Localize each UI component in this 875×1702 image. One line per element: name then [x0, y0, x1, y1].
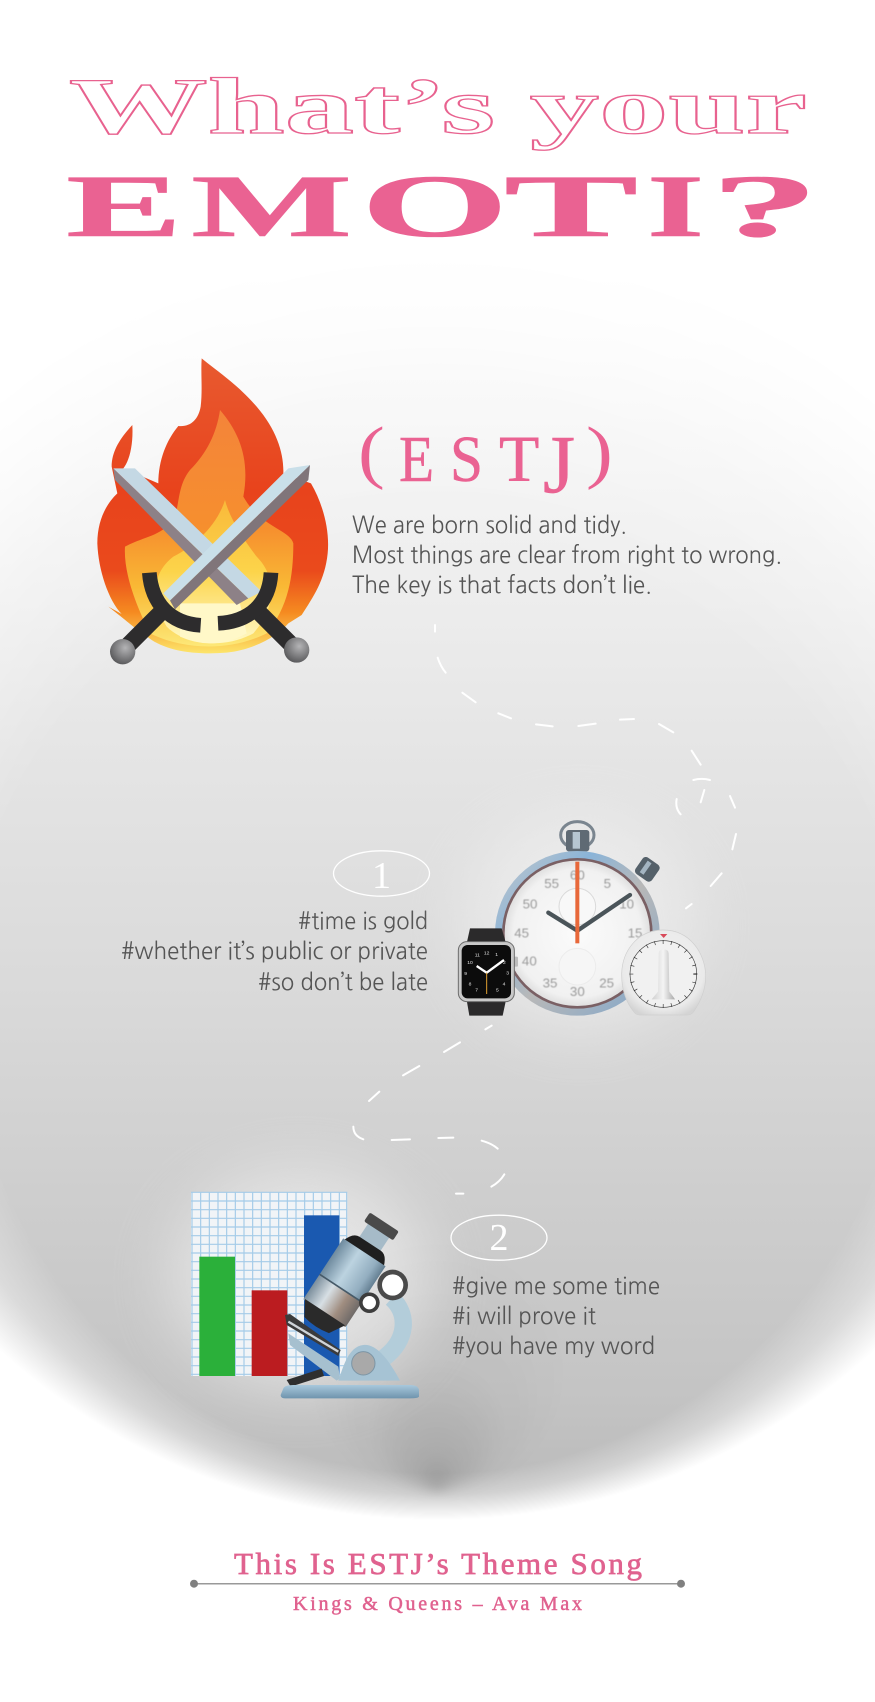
text block: hashtags 2: #i will prove it: [452, 1305, 597, 1328]
apple watch: 12: [484, 950, 490, 956]
apple watch: 1: [495, 952, 498, 958]
text block: hashtags 2: #you have my word: [452, 1335, 655, 1358]
apple watch: 11: [475, 953, 480, 959]
stopwatch: 15: [628, 925, 642, 940]
title line: EMOTI?: ?: [710, 157, 819, 256]
apple watch: 5: [496, 987, 499, 993]
title line: EMOTI?: I: [647, 158, 704, 256]
icon: bar chart and microscope: [191, 1192, 419, 1398]
text block: hashtags 1: [121, 910, 428, 994]
text block: hashtags 1: #so don’t be late: [258, 971, 428, 994]
apple watch: [458, 928, 518, 1016]
badge: number 2: 2: [490, 1217, 508, 1259]
background: soft grey sphere gradient: [0, 437, 875, 1516]
title line: EMOTI?: E: [66, 157, 182, 255]
apple watch: 9: [464, 971, 467, 977]
apple watch: 7: [475, 987, 478, 993]
badge: number 1: 1: [372, 855, 391, 897]
icon: stopwatch, watch and timer: [458, 822, 706, 1016]
stopwatch: 50: [523, 897, 537, 912]
title line: EMOTI?: [66, 156, 819, 256]
stopwatch: 55: [544, 876, 559, 891]
apple watch: 10: [467, 960, 473, 966]
heading: (ESTJ): E: [399, 423, 434, 496]
sword: right blade: [163, 465, 310, 609]
glow behind clocks: [460, 815, 700, 1035]
heading: (ESTJ): J: [543, 418, 575, 510]
heading: (ESTJ): T: [499, 423, 539, 496]
title line: What's your: What’s your: [69, 63, 807, 151]
microscope: [281, 1208, 419, 1398]
apple watch: 8: [469, 981, 472, 987]
icon: flame with crossed swords: [97, 358, 328, 664]
apple watch: 4: [503, 981, 506, 987]
text block: hashtags 2: [452, 1275, 660, 1358]
sword: handles and guards: [122, 573, 297, 652]
kitchen timer: [622, 930, 706, 1015]
dashed path: upper route: [435, 625, 736, 908]
badge: number 2: [451, 1215, 547, 1260]
title line: EMOTI?: T: [504, 156, 638, 255]
stopwatch: 40: [522, 953, 537, 968]
stopwatch: 10: [619, 897, 634, 912]
bar chart: [191, 1192, 347, 1376]
text block: hashtags 1: #whether it’s public or private: [121, 940, 428, 963]
footer subtitle: song and artist: Kings & Queens – Ava Max: [293, 1593, 582, 1615]
stopwatch: 30: [570, 984, 585, 999]
heading: (ESTJ): ): [586, 414, 613, 491]
heading: (ESTJ): [358, 414, 613, 510]
title line: EMOTI?: O: [361, 157, 508, 256]
dashed path: lower route: [353, 1026, 504, 1194]
heading: (ESTJ): (: [358, 414, 385, 491]
text block: ESTJ description: We are born solid and tidy.: [352, 514, 627, 537]
title line: EMOTI?: M: [191, 158, 352, 256]
text block: ESTJ description: Most things are clear from right to wrong.: [352, 544, 782, 567]
sword: pommels: [110, 637, 309, 664]
stopwatch: 45: [514, 925, 529, 940]
stopwatch: 5: [604, 876, 611, 891]
footer divider with end dots: [190, 1580, 685, 1588]
footer heading: theme song: This Is ESTJ’s Theme Song: [234, 1546, 642, 1581]
apple watch: 2: [503, 960, 506, 966]
stopwatch: 25: [599, 975, 614, 990]
stopwatch: 35: [543, 975, 557, 990]
badge: number 1: [334, 851, 430, 897]
apple watch: 3: [506, 970, 509, 976]
text block: ESTJ description: The key is that facts don’t lie.: [352, 574, 652, 597]
heading: (ESTJ): S: [450, 422, 483, 496]
glow behind chart and microscope: [170, 1170, 430, 1390]
text block: hashtags 2: #give me some time: [452, 1275, 660, 1298]
sword: left blade: [113, 468, 262, 605]
text block: hashtags 1: #time is gold: [298, 910, 428, 933]
stopwatch: [495, 822, 661, 1016]
text block: ESTJ description: [352, 514, 782, 597]
stopwatch: 60: [570, 867, 585, 882]
